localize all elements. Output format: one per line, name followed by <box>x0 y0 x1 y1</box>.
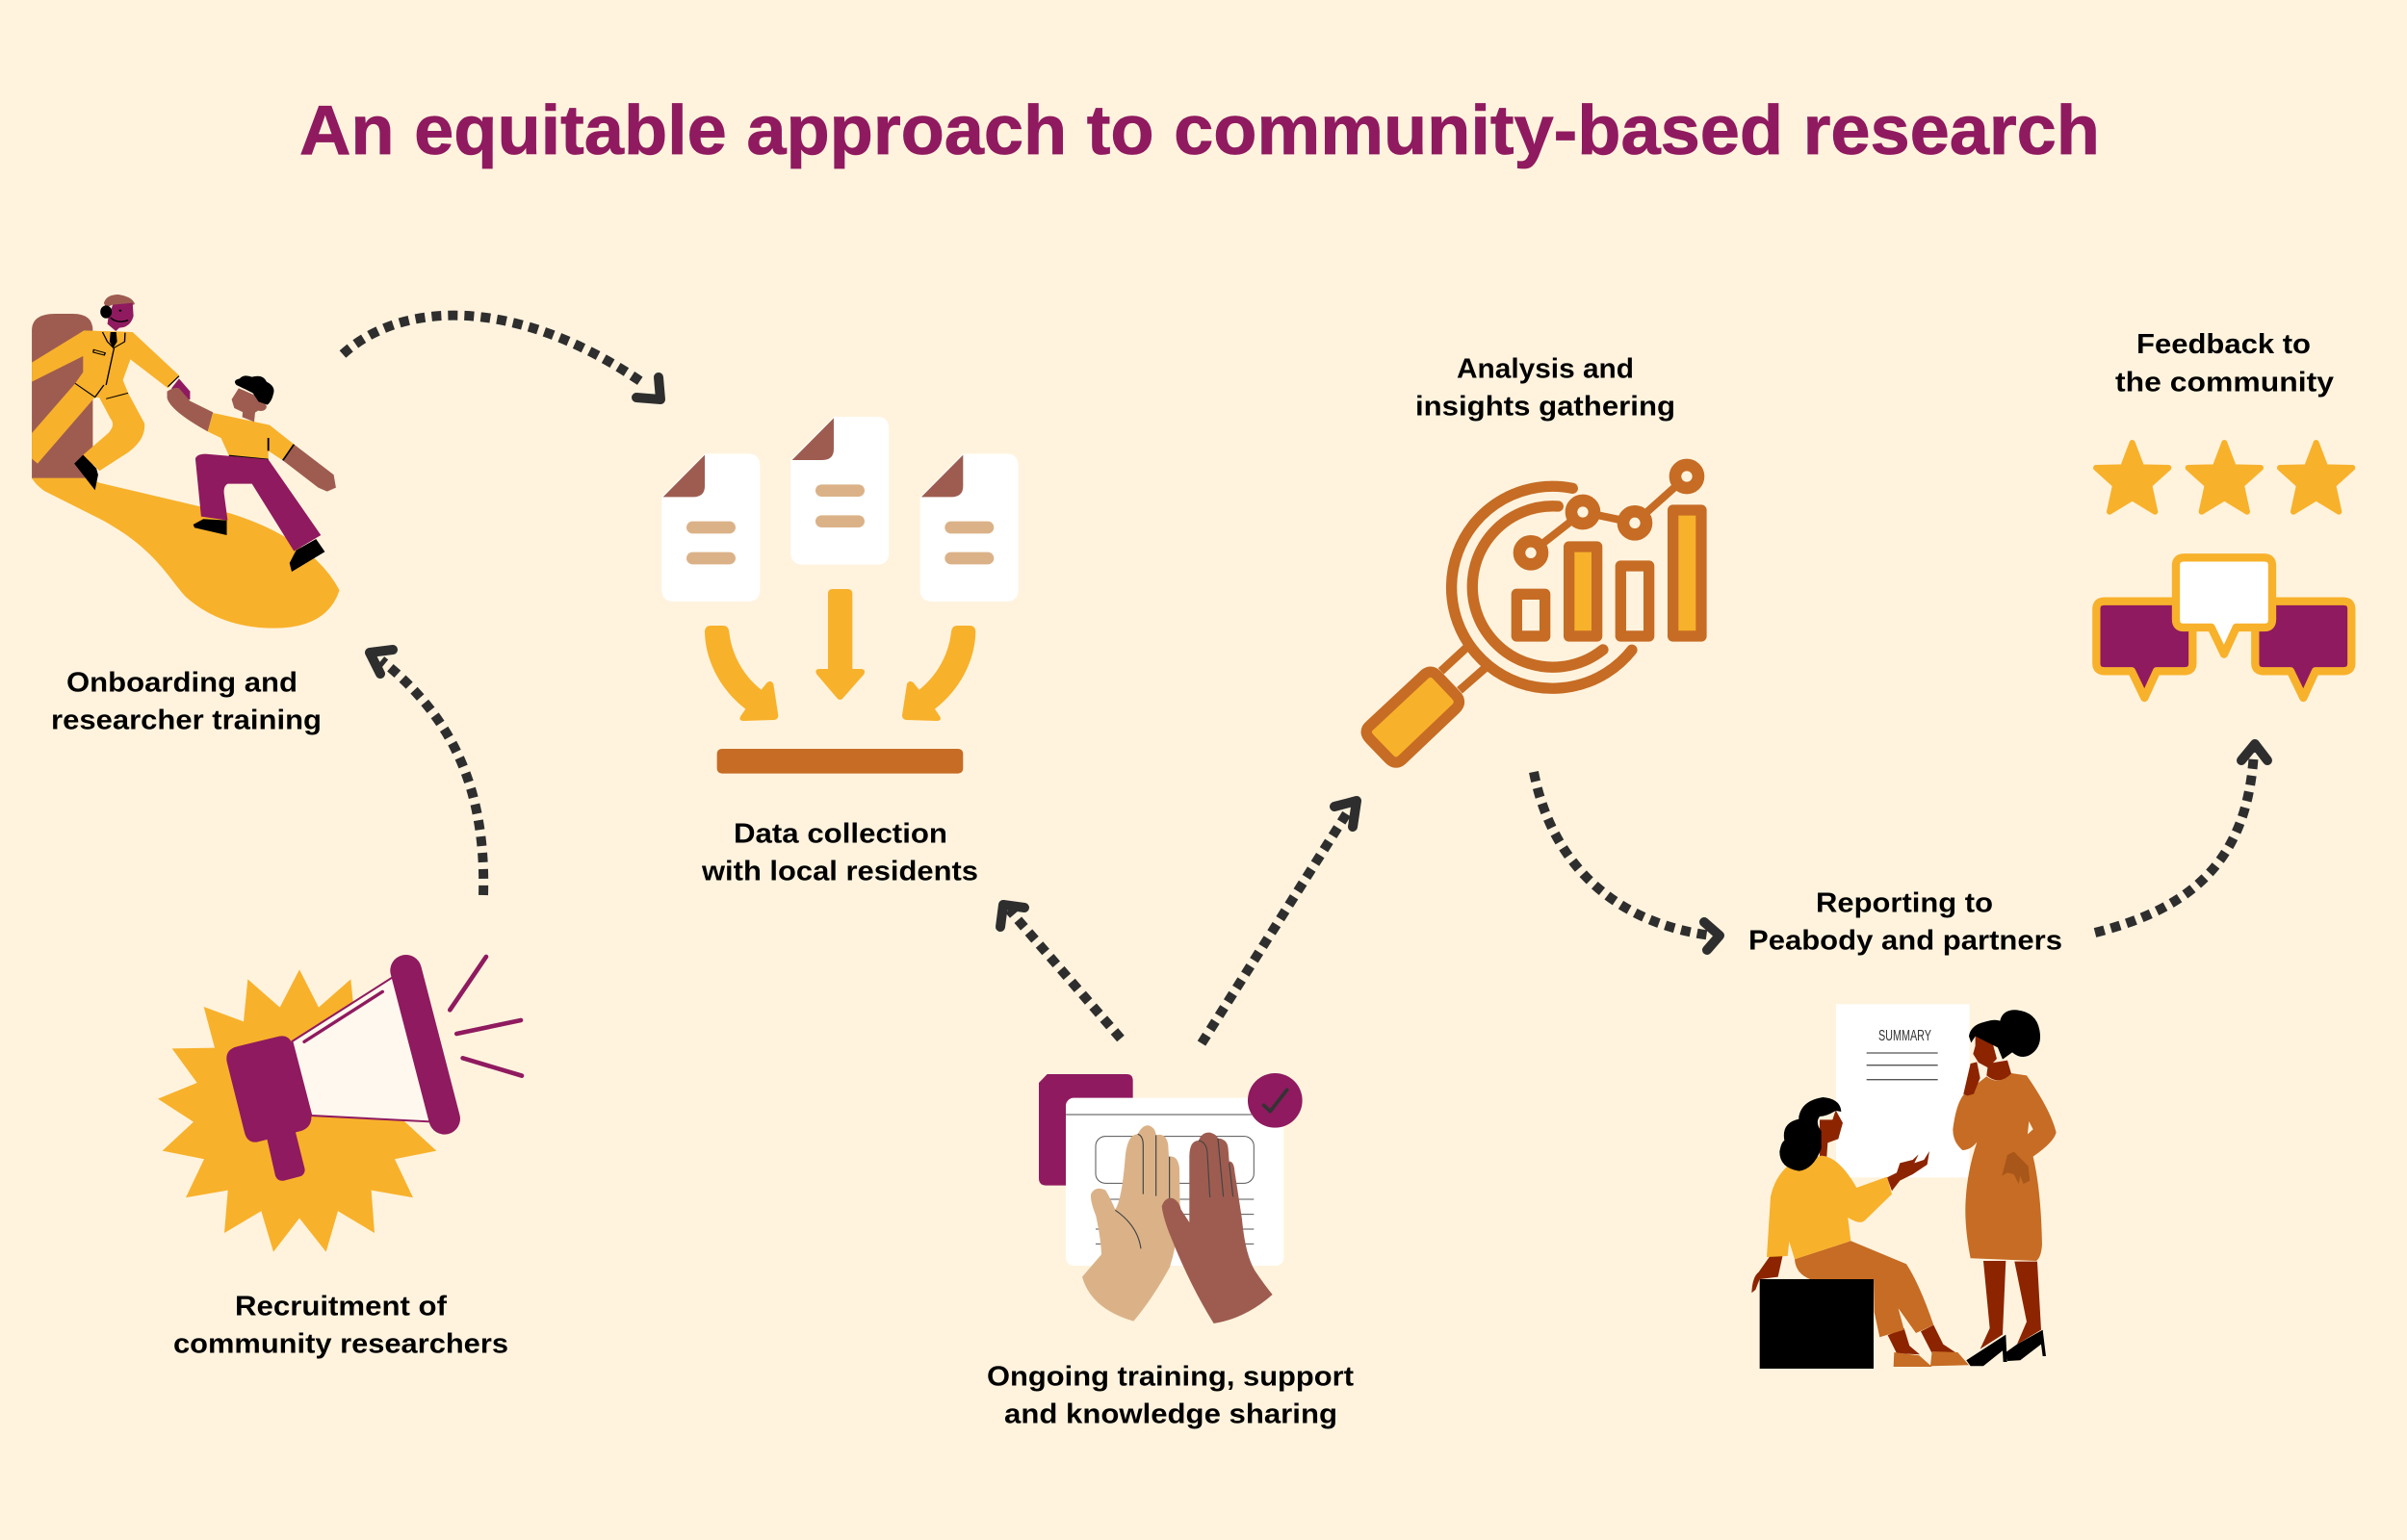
arrow: analysis to reporting <box>1534 772 1720 950</box>
label: the community <box>2115 368 2334 398</box>
label: Analysis and <box>1457 354 1634 385</box>
illustration: two figures climbing <box>32 295 340 629</box>
illustration: high five over documents <box>1039 1073 1303 1323</box>
label <box>51 668 322 735</box>
panel: reporting <box>1748 887 2062 1369</box>
panel: feedback <box>2096 329 2352 698</box>
label: researcher training <box>51 705 322 735</box>
icon: megaphone on starburst <box>158 957 522 1252</box>
panel: ongoing training <box>987 1073 1354 1430</box>
arrow: ongoing training to data collection <box>1000 905 1121 1039</box>
label: Ongoing training, support <box>987 1361 1354 1392</box>
icon: stars and speech bubbles <box>2096 443 2352 698</box>
label: with local residents <box>701 857 978 887</box>
label: Data collection <box>734 818 947 849</box>
illustration: documents and arrows <box>661 417 1019 774</box>
arrow: reporting to feedback <box>2095 744 2267 933</box>
panel: analysis <box>1366 354 1701 762</box>
label: community researchers <box>173 1328 508 1359</box>
label: Peabody and partners <box>1748 926 2062 957</box>
arrow: onboarding to data collection <box>343 316 660 399</box>
illustration: two women discussing a summary <box>1751 1004 2057 1369</box>
label <box>1748 887 2062 957</box>
illustration: two women discussing a summary: SUMMARY <box>1878 1028 1931 1044</box>
label: Recruitment of <box>235 1292 447 1322</box>
label <box>2115 329 2334 398</box>
label: Onboarding and <box>66 668 298 699</box>
icon: magnifying glass over chart <box>1366 465 1701 762</box>
label <box>987 1361 1354 1430</box>
panel: recruitment <box>158 957 522 1359</box>
panel: onboarding <box>32 295 340 735</box>
title: An equitable approach to community-based research <box>299 92 2100 169</box>
arrow: ongoing training to analysis <box>1202 801 1357 1043</box>
label: and knowledge sharing <box>1004 1399 1337 1430</box>
label: Feedback to <box>2136 329 2311 360</box>
label: insights gathering <box>1415 391 1675 422</box>
label <box>1415 354 1675 422</box>
label: Reporting to <box>1816 887 1993 918</box>
label <box>701 818 978 887</box>
label <box>173 1292 508 1359</box>
arrow: recruitment to onboarding <box>370 650 483 895</box>
panel: data collection <box>661 417 1019 887</box>
